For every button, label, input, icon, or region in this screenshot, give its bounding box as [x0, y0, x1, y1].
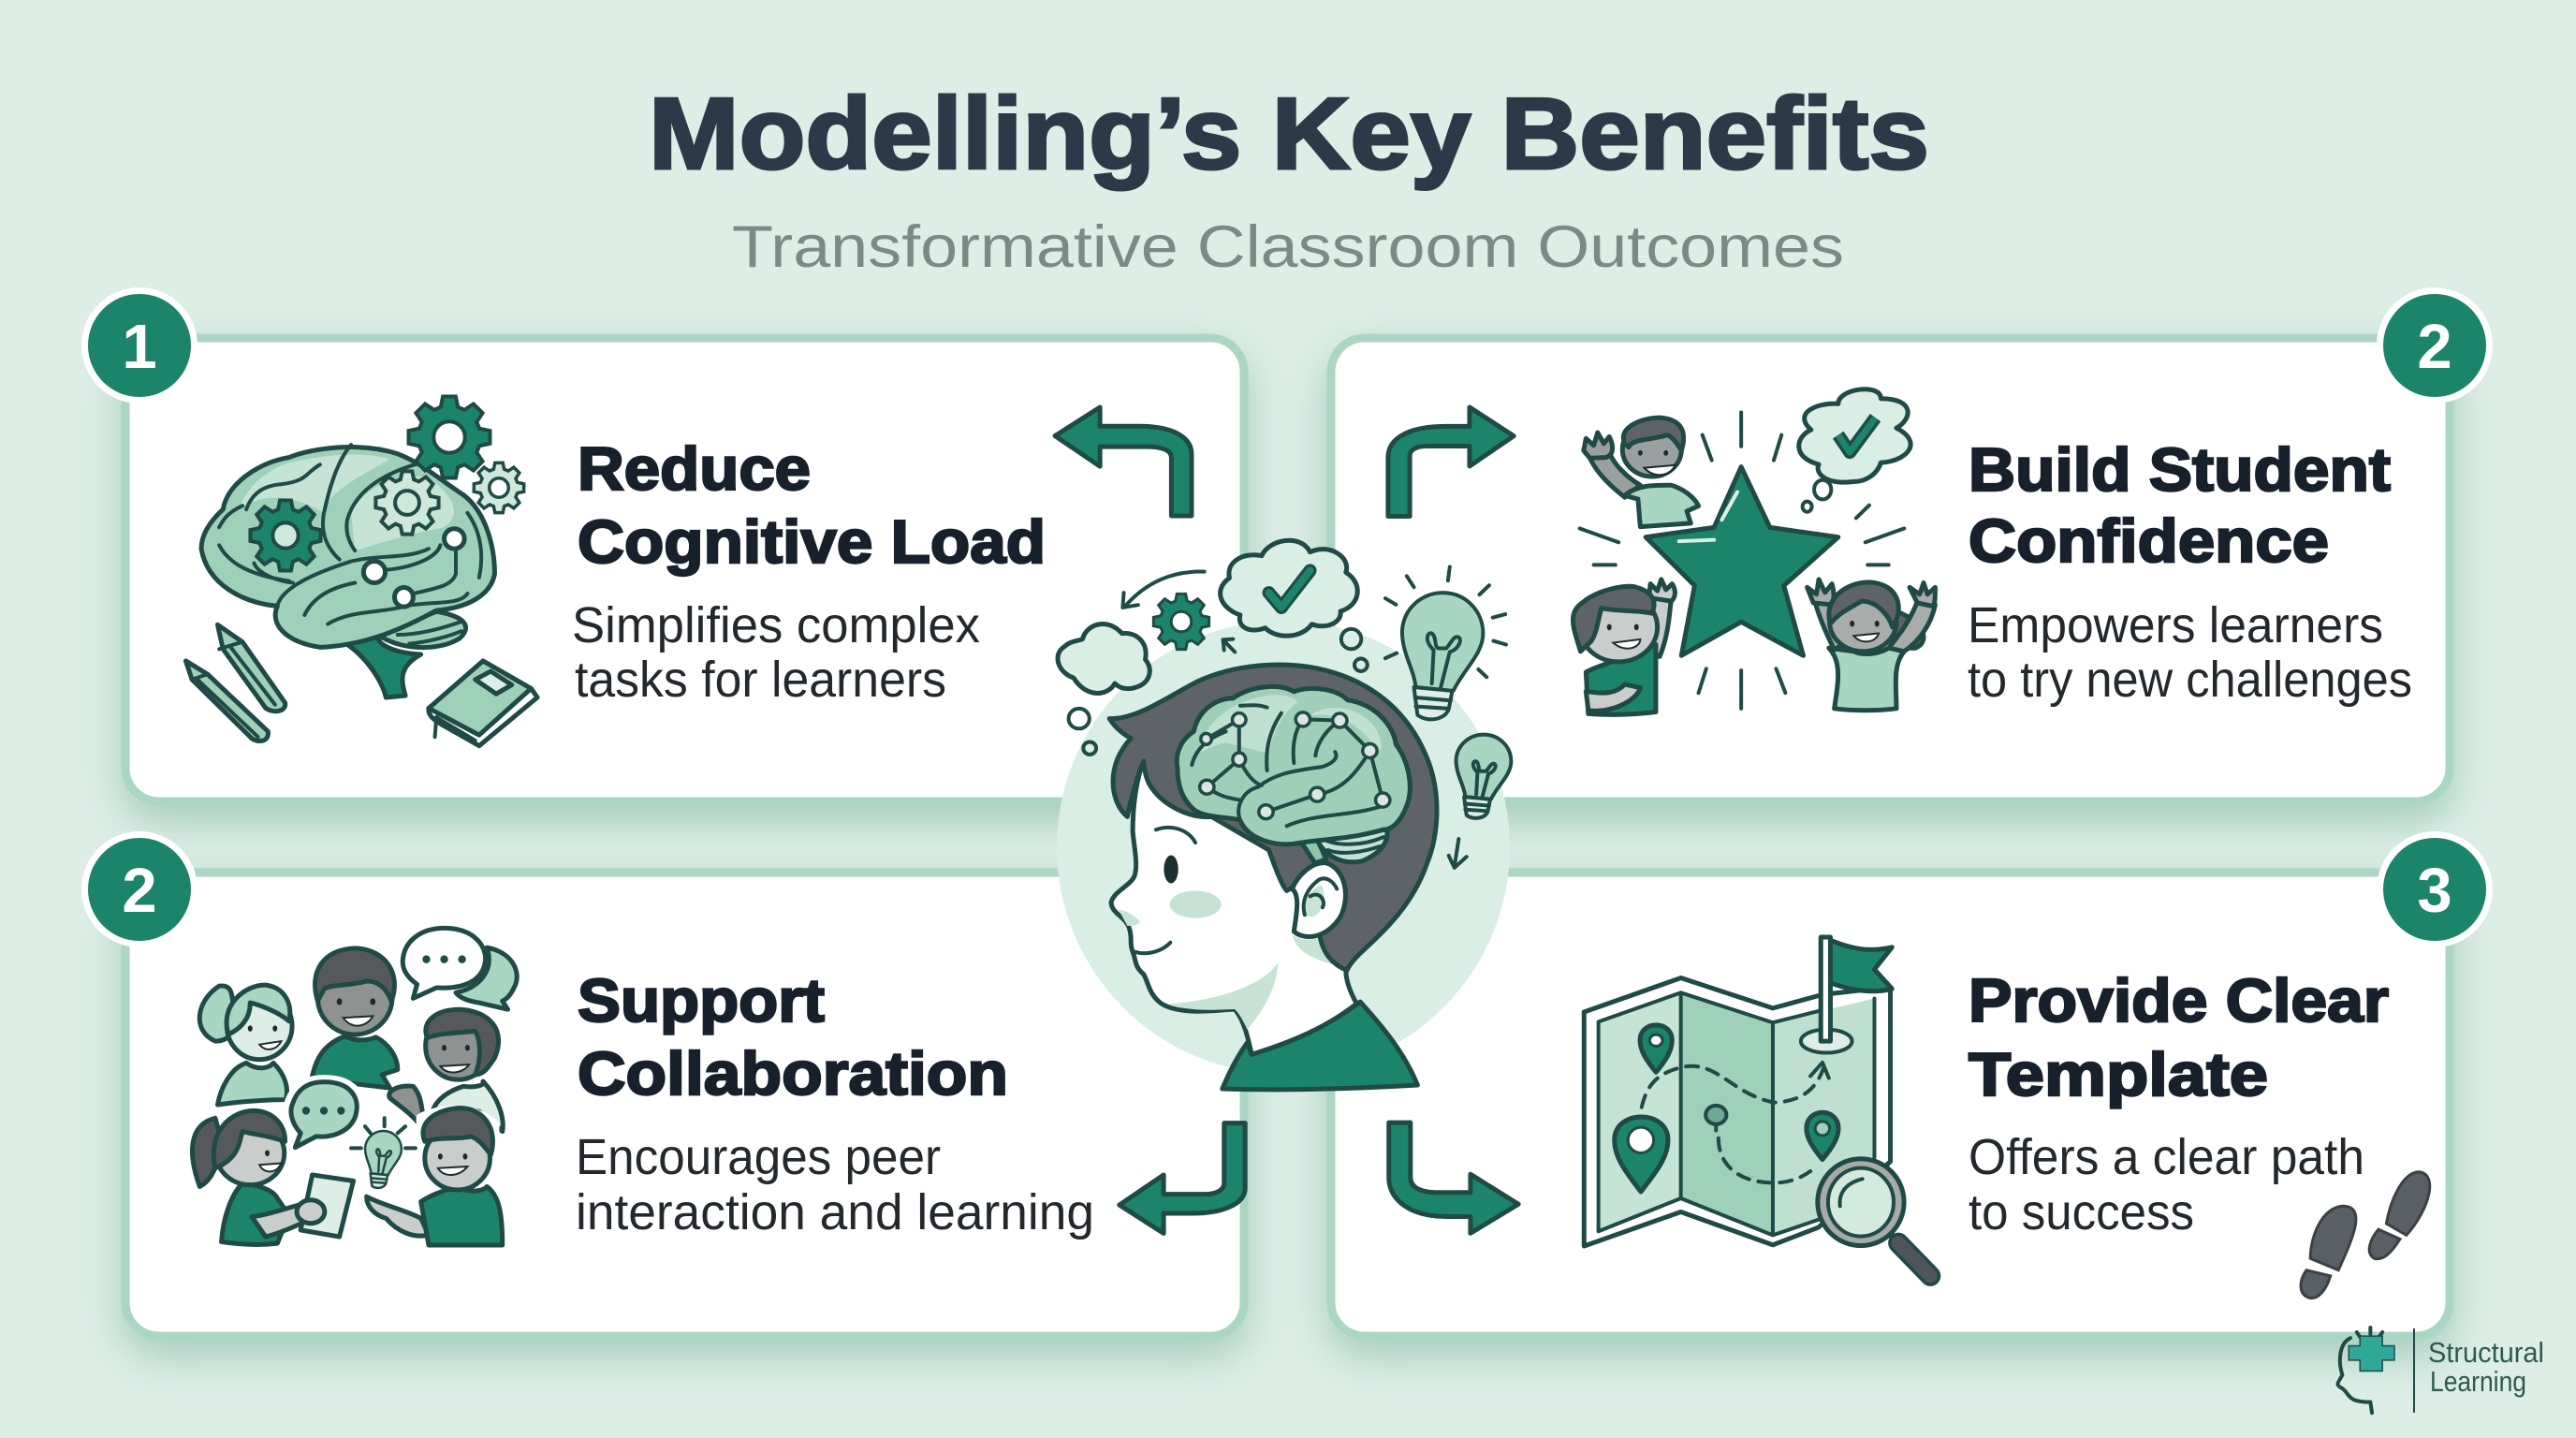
student: girl top left [199, 985, 292, 1105]
shirt [1222, 1002, 1417, 1090]
hair [1109, 665, 1437, 970]
logo divider [2413, 1328, 2415, 1413]
student: girl bottom left [192, 1110, 354, 1244]
ear [1292, 863, 1345, 937]
speech bubble: green back [456, 947, 517, 1009]
description: interaction and learning [576, 1184, 1094, 1240]
icon: pencils [185, 624, 285, 741]
heading: Reduce [578, 434, 811, 503]
gear: small right [474, 462, 524, 513]
background circle [1057, 621, 1510, 1074]
icon: group of students talking [192, 928, 517, 1245]
student: boy top centre [313, 948, 398, 1088]
heading: Build Student [1969, 435, 2391, 504]
subtitle: Transformative Classroom Outcomes [732, 214, 1844, 280]
magnifier [1818, 1159, 1930, 1276]
heading [578, 434, 1046, 576]
panel: support collaboration [81, 831, 1245, 1336]
description: to try new challenges [1968, 652, 2412, 708]
icon: map with route [1584, 937, 1930, 1276]
arrow: card 4 [1389, 1123, 1518, 1233]
gear: top [409, 397, 490, 477]
arrow: card 2 [1388, 407, 1514, 517]
title: Modelling’s Key Benefits [649, 77, 1929, 191]
description: to success [1969, 1184, 2194, 1240]
student: boy right [426, 1009, 503, 1132]
central figure: learner with brain and ideas [1057, 540, 1511, 1090]
arrow: card 3 [1120, 1123, 1245, 1233]
heading: Template [1969, 1040, 2268, 1108]
panel: reduce cognitive load [81, 287, 1244, 801]
logo text: Learning [2430, 1365, 2526, 1398]
description: Offers a clear path [1969, 1129, 2364, 1185]
badge 2 [81, 831, 198, 947]
heading: Collaboration [578, 1039, 1008, 1108]
rays around bulb [1385, 566, 1506, 677]
icon: small idea bulb [365, 1131, 402, 1188]
student: boy bottom right [367, 1108, 503, 1245]
badge 2 [2377, 287, 2493, 404]
logo mark [2338, 1328, 2394, 1413]
icon: star with cheering students [1573, 389, 1935, 714]
panel: provide clear template [1331, 831, 2493, 1336]
logo text: Structural [2428, 1336, 2544, 1369]
description: Encourages peer [576, 1129, 941, 1185]
destination flag [1801, 937, 1892, 1053]
badge 3 [2377, 831, 2493, 947]
badge 1 [81, 287, 198, 404]
map sheet [1584, 978, 1891, 1246]
description [576, 1129, 1094, 1240]
small curved arrows [1122, 572, 1467, 868]
badge 2: 2 [122, 856, 157, 926]
rays around small bulb [351, 1118, 416, 1148]
heading: Support [578, 966, 825, 1034]
icon: book [429, 661, 537, 746]
thought dots [1069, 629, 1368, 755]
student: top left [1584, 418, 1699, 527]
thought cloud: check [1221, 540, 1357, 636]
pins [1615, 1025, 1838, 1192]
student: bottom right [1808, 580, 1935, 711]
face [1111, 761, 1356, 1054]
description [1968, 597, 2412, 708]
star [1646, 467, 1838, 655]
rays [1580, 413, 1904, 709]
speech bubble: top [402, 928, 486, 998]
gear: inside light [375, 471, 439, 535]
badge 3: 3 [2417, 856, 2452, 926]
waving hand [389, 1086, 422, 1126]
heading: Confidence [1969, 506, 2329, 575]
logo text [2428, 1336, 2544, 1398]
brain in head [1177, 686, 1410, 863]
logo: Structural Learning [2338, 1328, 2544, 1413]
icon: footprints [2301, 1172, 2430, 1299]
arrow: card 1 [1055, 407, 1192, 516]
description: Simplifies complex [572, 597, 980, 653]
speech bubble: middle [288, 1079, 360, 1148]
route [1642, 1063, 1829, 1182]
icon: brain with gears [201, 397, 524, 697]
badge 1: 1 [122, 312, 157, 382]
icon: large light bulb [1402, 593, 1483, 719]
heading: Provide Clear [1969, 966, 2389, 1034]
description: Empowers learners [1968, 597, 2383, 653]
description: tasks for learners [575, 652, 946, 708]
gear: inside dark [250, 500, 321, 571]
icon: gear [1153, 594, 1209, 650]
thought cloud with check [1799, 389, 1910, 512]
panel: build student confidence [1331, 287, 2493, 801]
thought cloud: empty [1058, 624, 1149, 693]
badge 2: 2 [2417, 312, 2452, 382]
description [572, 597, 980, 708]
heading [578, 966, 1008, 1108]
heading: Cognitive Load [578, 507, 1046, 576]
student: bottom left [1573, 580, 1675, 714]
heading [1969, 435, 2391, 575]
description [1969, 1129, 2364, 1240]
heading [1969, 966, 2389, 1108]
icon: small light bulb [1456, 735, 1511, 818]
